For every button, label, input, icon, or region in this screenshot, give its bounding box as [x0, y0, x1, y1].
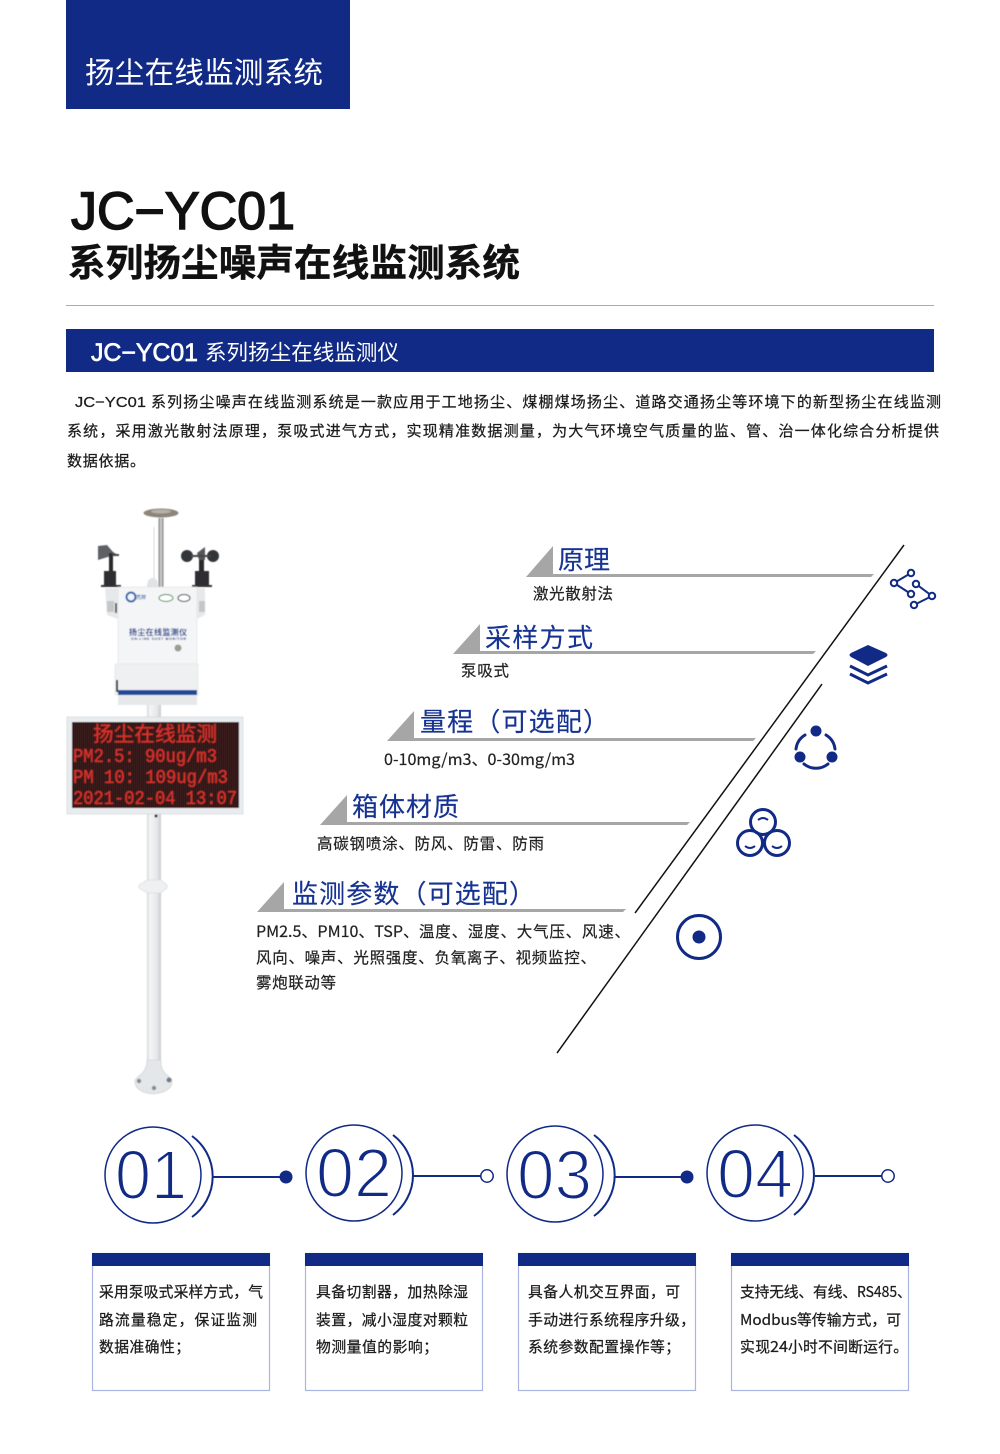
header tab [66, 0, 350, 109]
product illustration: monitor on pole [67, 508, 243, 1094]
card 4: 支持无线、有线、 [740, 1281, 857, 1302]
step 04 [707, 1125, 894, 1221]
feature: 原理: 原理 [558, 540, 610, 577]
sensor mast [144, 508, 178, 588]
feature: 量程: 量程（可选配） [420, 702, 609, 739]
card 4: RS485、 [857, 1281, 911, 1302]
LED display: 扬尘在线监测 [93, 717, 217, 747]
feature: 采样方式: 采样方式 [485, 618, 593, 655]
feature: 箱体材质: 箱体材质 [352, 787, 459, 824]
title: JC−YC01 [71, 182, 295, 241]
LED display: 2021-02-04 13:07 [73, 788, 237, 810]
LED display [67, 717, 243, 814]
enclosure box [105, 587, 205, 705]
feature: 监测参数: 雾炮联动等 [256, 971, 336, 993]
card 2 [305, 1253, 483, 1390]
step 04: 04 [717, 1135, 793, 1213]
enclosure box: 亮牌 [136, 594, 146, 601]
card 3: 具备人机交互界面，可 [528, 1281, 680, 1302]
icon: three circles [738, 810, 790, 856]
feature: 量程 [384, 702, 756, 770]
intro paragraph: 系统，采用激光散射法原理，泵吸式进气方式，实现精准数据测量，为大气环境空气质量的监、管、治一体化综合分析提供 [67, 420, 939, 441]
LED display: PM 10: 109ug/m3 [73, 767, 228, 789]
intro paragraph: 系列扬尘噪声在线监测系统是一款应用于工地扬尘、煤棚煤场扬尘、道路交通扬尘等环境下的新型扬尘在线监测 [151, 391, 941, 412]
step 01: 01 [115, 1136, 187, 1214]
intro paragraph: JC−YC01 [75, 394, 146, 411]
card 2: 装置，减小湿度对颗粒 [316, 1309, 468, 1330]
enclosure box: ON-LINE DUST MONITOR [131, 637, 186, 641]
LED display: PM2.5: 90ug/m3 [73, 746, 217, 768]
feature: 监测参数: PM2.5、PM10、TSP、 [256, 920, 419, 942]
card 1 [92, 1253, 270, 1390]
icon: target [678, 916, 720, 958]
intro paragraph: 数据依据。 [67, 450, 145, 471]
title [68, 182, 520, 287]
step 03: 03 [517, 1136, 592, 1214]
cup anemometer [181, 547, 219, 587]
card 1: 数据准确性； [99, 1336, 190, 1357]
card 4 [731, 1253, 911, 1390]
wind vane [98, 545, 121, 587]
step 02: 02 [316, 1134, 392, 1212]
step 01 [105, 1127, 292, 1223]
diagonal divider lines [557, 545, 904, 1053]
card 4: 24 [770, 1336, 788, 1357]
feature: 监测参数: 温度、湿度、大气压、风速、 [419, 920, 630, 942]
card 3 [518, 1253, 696, 1390]
icon: network nodes [891, 570, 935, 608]
feature: 箱体材质: 高碳钢喷涂、防风、防雷、防雨 [317, 832, 544, 854]
section banner: 系列扬尘在线监测仪 [205, 336, 399, 367]
section banner: JC−YC01 [91, 339, 198, 367]
card 2: 物测量值的影响； [316, 1336, 438, 1357]
feature: 原理: 激光散射法 [533, 582, 613, 604]
card 1: 路流量稳定，保证监测 [99, 1309, 257, 1330]
step 02 [306, 1125, 493, 1221]
header tab: 扬尘在线监测系统 [85, 50, 323, 92]
card 1: 采用泵吸式采样方式，气 [99, 1281, 263, 1302]
pole [135, 704, 172, 1094]
feature: 采样方式: 泵吸式 [461, 659, 509, 681]
card 4: 等传输方式，可 [797, 1309, 901, 1330]
step 03 [507, 1126, 694, 1222]
intro paragraph [67, 391, 941, 471]
card 3: 手动进行系统程序升级， [528, 1309, 695, 1330]
card 3: 系统参数配置操作等； [528, 1336, 680, 1357]
title: 系列扬尘噪声在线监测系统 [68, 232, 520, 287]
card 2: 具备切割器，加热除湿 [316, 1281, 468, 1302]
icon: layers [850, 645, 888, 683]
feature: 量程: 0-10mg/m3、0-30mg/m3 [384, 748, 575, 770]
icon: three-node cycle [794, 726, 838, 768]
feature: 采样方式 [453, 618, 816, 681]
feature: 监测参数: 监测参数（可选配） [292, 874, 535, 911]
card 4: 实现 [740, 1336, 770, 1357]
card 4: Modbus [740, 1309, 797, 1330]
feature: 箱体材质 [317, 787, 690, 854]
feature: 监测参数: 风向、噪声、光照强度、负氧离子、视频监控、 [256, 946, 596, 968]
feature: 原理 [526, 540, 874, 604]
section banner [66, 329, 934, 372]
enclosure box: 扬尘在线监测仪 [129, 627, 187, 638]
card 4: 小时不间断运行。 [788, 1336, 908, 1357]
feature: 监测参数 [256, 874, 630, 993]
